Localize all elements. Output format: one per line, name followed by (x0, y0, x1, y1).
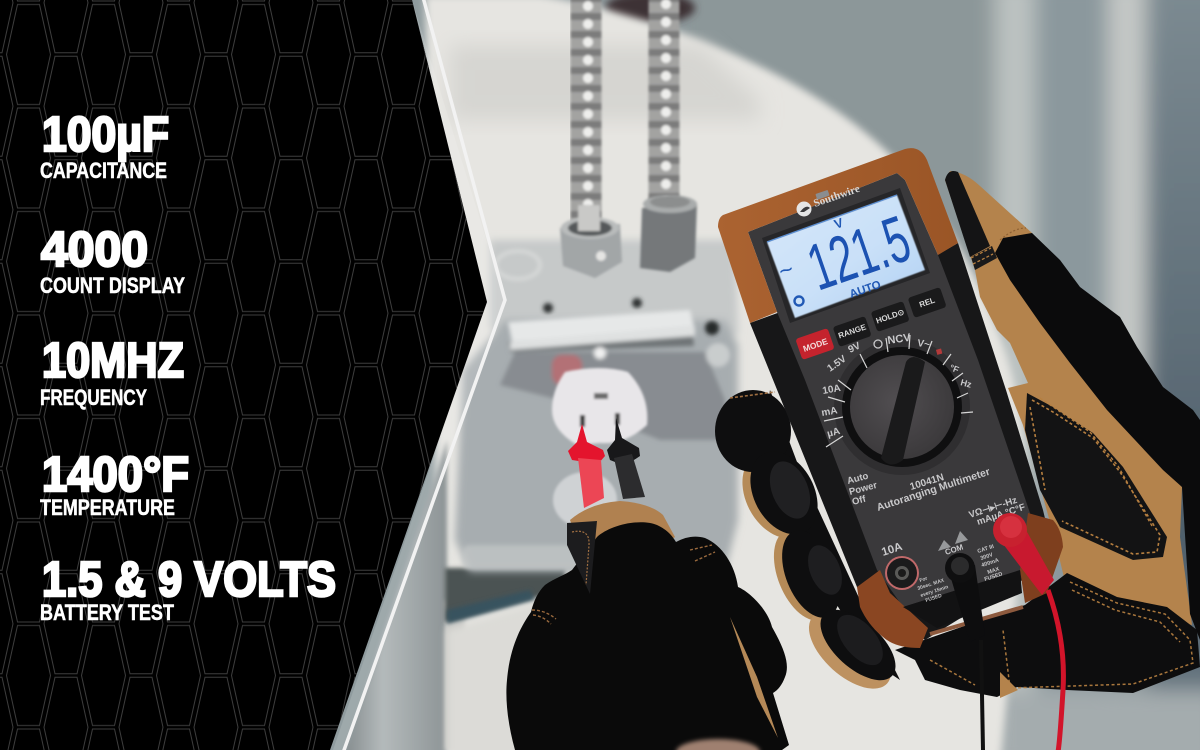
LCD screen: ~ (775, 256, 797, 286)
buttons: REL (918, 296, 936, 309)
left metal panel (340, 440, 447, 750)
rotary dial: °F (948, 362, 961, 375)
printed labels (846, 466, 1027, 604)
rotary dial: ◆ (933, 345, 946, 358)
left panel: black chevron with hexagon pattern (0, 0, 505, 750)
rotary dial: µA (826, 426, 841, 440)
rotary dial: 9V (847, 340, 863, 356)
tank (425, 0, 1025, 750)
stat: temperature (40, 448, 189, 520)
rotary dial: Hz (959, 377, 973, 390)
stat: frequency: FREQUENCY (40, 385, 147, 410)
buttons: MODE (802, 336, 829, 354)
stat: frequency (40, 334, 184, 410)
chevron outline (343, 0, 505, 750)
rotary dial: 10A (822, 383, 842, 397)
brown top bumper (718, 148, 958, 323)
brown bottom bumpers (857, 570, 928, 648)
printed labels: FUSED (984, 571, 1003, 583)
10A jack (885, 556, 919, 590)
stat: count display: COUNT DISPLAY (40, 273, 185, 298)
stat: frequency: 10MHZ (42, 334, 184, 388)
brand logo (796, 183, 862, 216)
printed labels: 10A (880, 541, 904, 559)
meter face (748, 173, 1030, 607)
stat: capacitance: 100µF (42, 108, 169, 162)
printed labels: Power (848, 480, 879, 498)
printed labels: For (919, 576, 928, 584)
lower palm (895, 573, 1200, 697)
printed labels: Auto (846, 471, 870, 487)
stat: count display (40, 223, 185, 298)
buttons (795, 287, 947, 360)
stat: temperature: 1400°F (42, 448, 189, 502)
LCD bezel (762, 188, 930, 323)
dark gap below box (445, 568, 565, 622)
thumb tip (945, 171, 990, 257)
buttons: RANGE (837, 322, 868, 340)
connectors (560, 195, 697, 278)
printed labels: MAX (987, 566, 1001, 576)
stat: capacitance (40, 108, 169, 183)
printed labels: COM (944, 542, 965, 557)
photo: right hand glove (895, 171, 1200, 698)
rotary dial: 1.5V (825, 353, 849, 374)
photo: left hand glove (506, 501, 789, 750)
rotary dial: NCV (887, 332, 912, 347)
stat: count display: 4000 (41, 223, 148, 277)
photo: metal conduits (586, 0, 666, 225)
rotary dial (821, 332, 973, 475)
red test lead (993, 513, 1063, 750)
black grip pad (1025, 393, 1167, 560)
printed labels: VΩ⊣▸⊢-Hz (968, 495, 1019, 521)
printed labels: every 15min (920, 584, 949, 599)
printed labels: mAµA °C°F (976, 502, 1027, 528)
printed labels: Autoranging Multimeter (875, 466, 992, 514)
photo: junction box (455, 195, 738, 572)
printed labels: CAT III (977, 544, 995, 555)
stat: capacitance: CAPACITANCE (40, 158, 167, 183)
stat: battery test: 1.5 & 9 VOLTS (42, 553, 336, 607)
outlet (552, 368, 647, 528)
LCD screen: V (832, 215, 845, 232)
black mesh back of hand (995, 233, 1200, 640)
multimeter (718, 148, 1063, 750)
brand logo: Southwire (812, 183, 862, 210)
tan palm and thumb (945, 171, 1192, 625)
photo: right hand fingers (715, 390, 908, 703)
meter body (750, 243, 1055, 640)
LCD screen: AUTO (848, 279, 883, 301)
printed labels: FUSED (925, 593, 943, 604)
black test lead (945, 553, 985, 750)
LCD screen: 121.5 (798, 201, 919, 304)
stat: battery test (40, 553, 336, 625)
LCD screen (767, 195, 925, 318)
stat: battery test: BATTERY TEST (40, 600, 174, 625)
test probes (568, 418, 645, 508)
rotary dial: mA (821, 405, 838, 419)
buttons: HOLD⊙ (875, 307, 906, 326)
printed labels: 30sec. MAX (917, 577, 946, 592)
rotary dial: V~ (917, 338, 931, 351)
printed labels: 300V (980, 552, 994, 562)
stat: temperature: TEMPERATURE (40, 495, 175, 520)
printed labels: 10041N (909, 472, 945, 493)
printed labels: 400mA (981, 558, 1000, 569)
printed labels: Off (851, 494, 868, 508)
